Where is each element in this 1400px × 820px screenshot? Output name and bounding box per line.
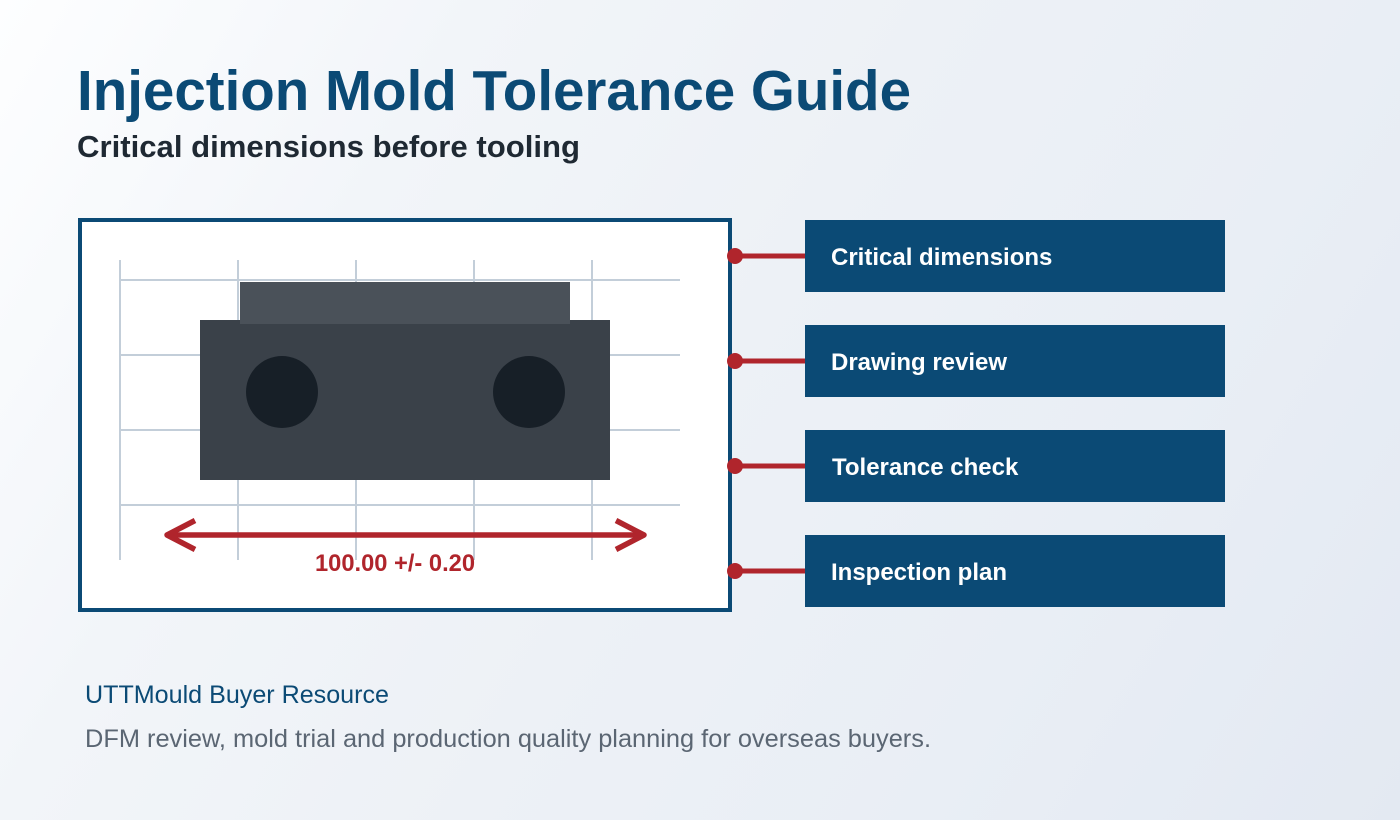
footer description: DFM review, mold trial and production quality planning for overseas buyers. (85, 725, 931, 753)
callout: tolerance check (727, 430, 1225, 502)
dimension arrow (167, 520, 644, 550)
title: Injection Mold Tolerance Guide (77, 59, 911, 122)
callout: drawing review (727, 325, 1225, 397)
callout: inspection plan: Inspection plan (831, 559, 1007, 586)
dimension label: 100.00 +/- 0.20 (315, 550, 475, 577)
callout: drawing review: Drawing review (831, 349, 1007, 376)
mold part (200, 282, 610, 480)
subtitle: Critical dimensions before tooling (77, 129, 580, 164)
callout: inspection plan (727, 535, 1225, 607)
callout: critical dimensions: Critical dimensions (831, 244, 1052, 271)
footer brand: UTTMould Buyer Resource (85, 681, 389, 709)
panel: drawing (80, 220, 730, 610)
callout: critical dimensions (727, 220, 1225, 292)
callout: tolerance check: Tolerance check (832, 454, 1019, 481)
